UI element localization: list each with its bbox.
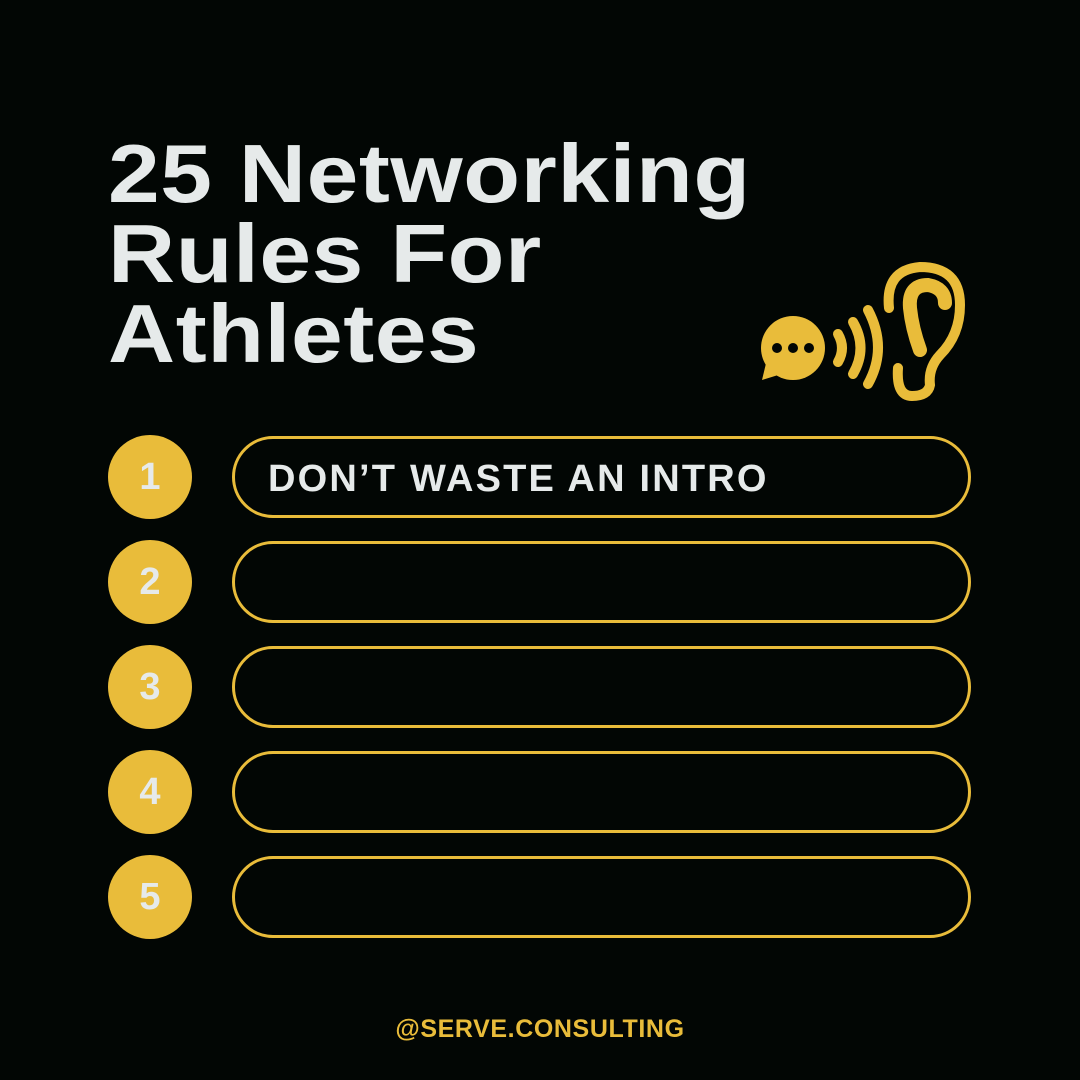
row 1 [108, 435, 192, 519]
row 3: 3 [139, 666, 161, 708]
row 3 [108, 645, 192, 729]
row 4 [108, 750, 192, 834]
row 4: 4 [139, 771, 161, 813]
title: Rules For [108, 207, 542, 300]
footer handle: @SERVE.CONSULTING [395, 1015, 685, 1043]
title: 25 Networking [108, 127, 751, 220]
row 5 [108, 855, 192, 939]
row 1: 1 [139, 456, 161, 498]
title [108, 127, 751, 380]
icon: speech bubble to ear [761, 262, 965, 401]
text: DON’T WASTE AN INTRO [268, 458, 769, 500]
row 2: 2 [139, 561, 161, 603]
row 2 [108, 540, 192, 624]
title: Athletes [108, 287, 479, 380]
row 5: 5 [139, 876, 161, 918]
